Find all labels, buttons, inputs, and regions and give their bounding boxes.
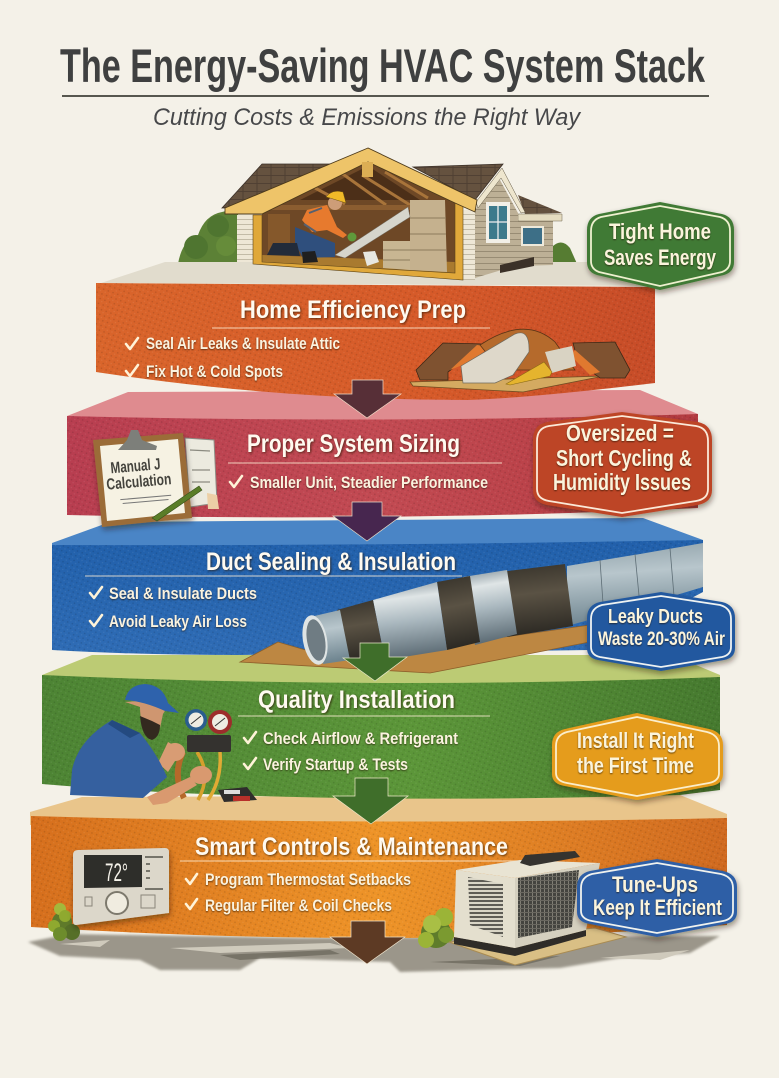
icon: technician with gauges [70,684,257,805]
bullet: avoid leaks: Avoid Leaky Air Loss [109,612,247,631]
icon: attic insulation model [410,329,630,392]
callout: tight home: Tight Home [609,219,711,244]
callout: tune-ups: Keep It Efficient [593,895,723,920]
bullet: hot and cold spots: Fix Hot & Cold Spots [146,362,283,381]
clipboard text: Calculation [106,471,172,494]
heading: home efficiency: Home Efficiency Prep [240,296,466,324]
callout: tune-ups [577,859,737,937]
callout: install it right: the First Time [577,753,694,778]
icon: left shrub [48,903,80,941]
arrow: installation to controls [333,778,408,824]
callout: oversized warning: Oversized = [566,420,674,446]
callout: tight home [587,202,734,290]
panel: home efficiency prep [95,148,656,400]
bullet: filter checks: Regular Filter & Coil Checks [205,896,392,915]
thermostat reading: 72° [105,859,128,887]
heading: quality installation: Quality Installation [258,686,455,714]
icon: thermostat [73,848,169,925]
callout: oversized warning [533,412,712,517]
clipboard text [104,455,173,505]
callout: tight home: Saves Energy [604,245,717,270]
panel: smart controls and maintenance [30,795,727,965]
icon: centre shrub [418,908,454,948]
arrow: efficiency to sizing [334,380,401,418]
bullet: check airflow: Check Airflow & Refrigerant [263,729,458,748]
bullet: program thermostat: Program Thermostat Setbacks [205,870,411,889]
icon: right bush [553,242,578,266]
subtitle: Cutting Costs & Emissions the Right Way [153,104,582,131]
bullet: smaller unit: Smaller Unit, Steadier Performance [250,473,488,492]
callout: install it right [552,713,723,800]
icon: insulated duct [240,543,703,673]
callout: install it right: Install It Right [577,728,695,753]
callout: tune-ups: Tune-Ups [612,872,698,897]
bullet: verify startup: Verify Startup & Tests [263,755,408,774]
worker in attic [267,191,356,263]
bullet: seal ducts: Seal & Insulate Ducts [109,584,257,603]
heading: duct sealing: Duct Sealing & Insulation [206,548,456,576]
illustration: house attic cutaway [95,148,656,291]
panel: proper system sizing [67,390,698,527]
heading: smart controls: Smart Controls & Maintenance [195,833,508,861]
ground under the stack [28,934,720,972]
callout: leaky ducts: Waste 20-30% Air [598,629,725,650]
panel: quality installation [42,655,720,805]
heading: proper sizing: Proper System Sizing [247,430,460,458]
callout: leaky ducts [587,592,735,671]
panel: duct sealing and insulation [52,518,703,655]
arrow: ducts to installation [343,643,407,681]
icon: outdoor AC unit [449,851,626,965]
arrow: sizing to ducts [333,502,401,541]
callout: oversized warning: Humidity Issues [553,469,691,495]
icon: clipboard with Manual J calculation [93,430,219,527]
icon: left bush [178,208,238,264]
arrow: final [330,921,405,964]
callout: oversized warning: Short Cycling & [556,445,692,471]
callout: leaky ducts: Leaky Ducts [608,606,703,628]
clipboard text: Manual J [110,456,161,477]
bullet: seal air leaks: Seal Air Leaks & Insulate Attic [146,334,340,353]
